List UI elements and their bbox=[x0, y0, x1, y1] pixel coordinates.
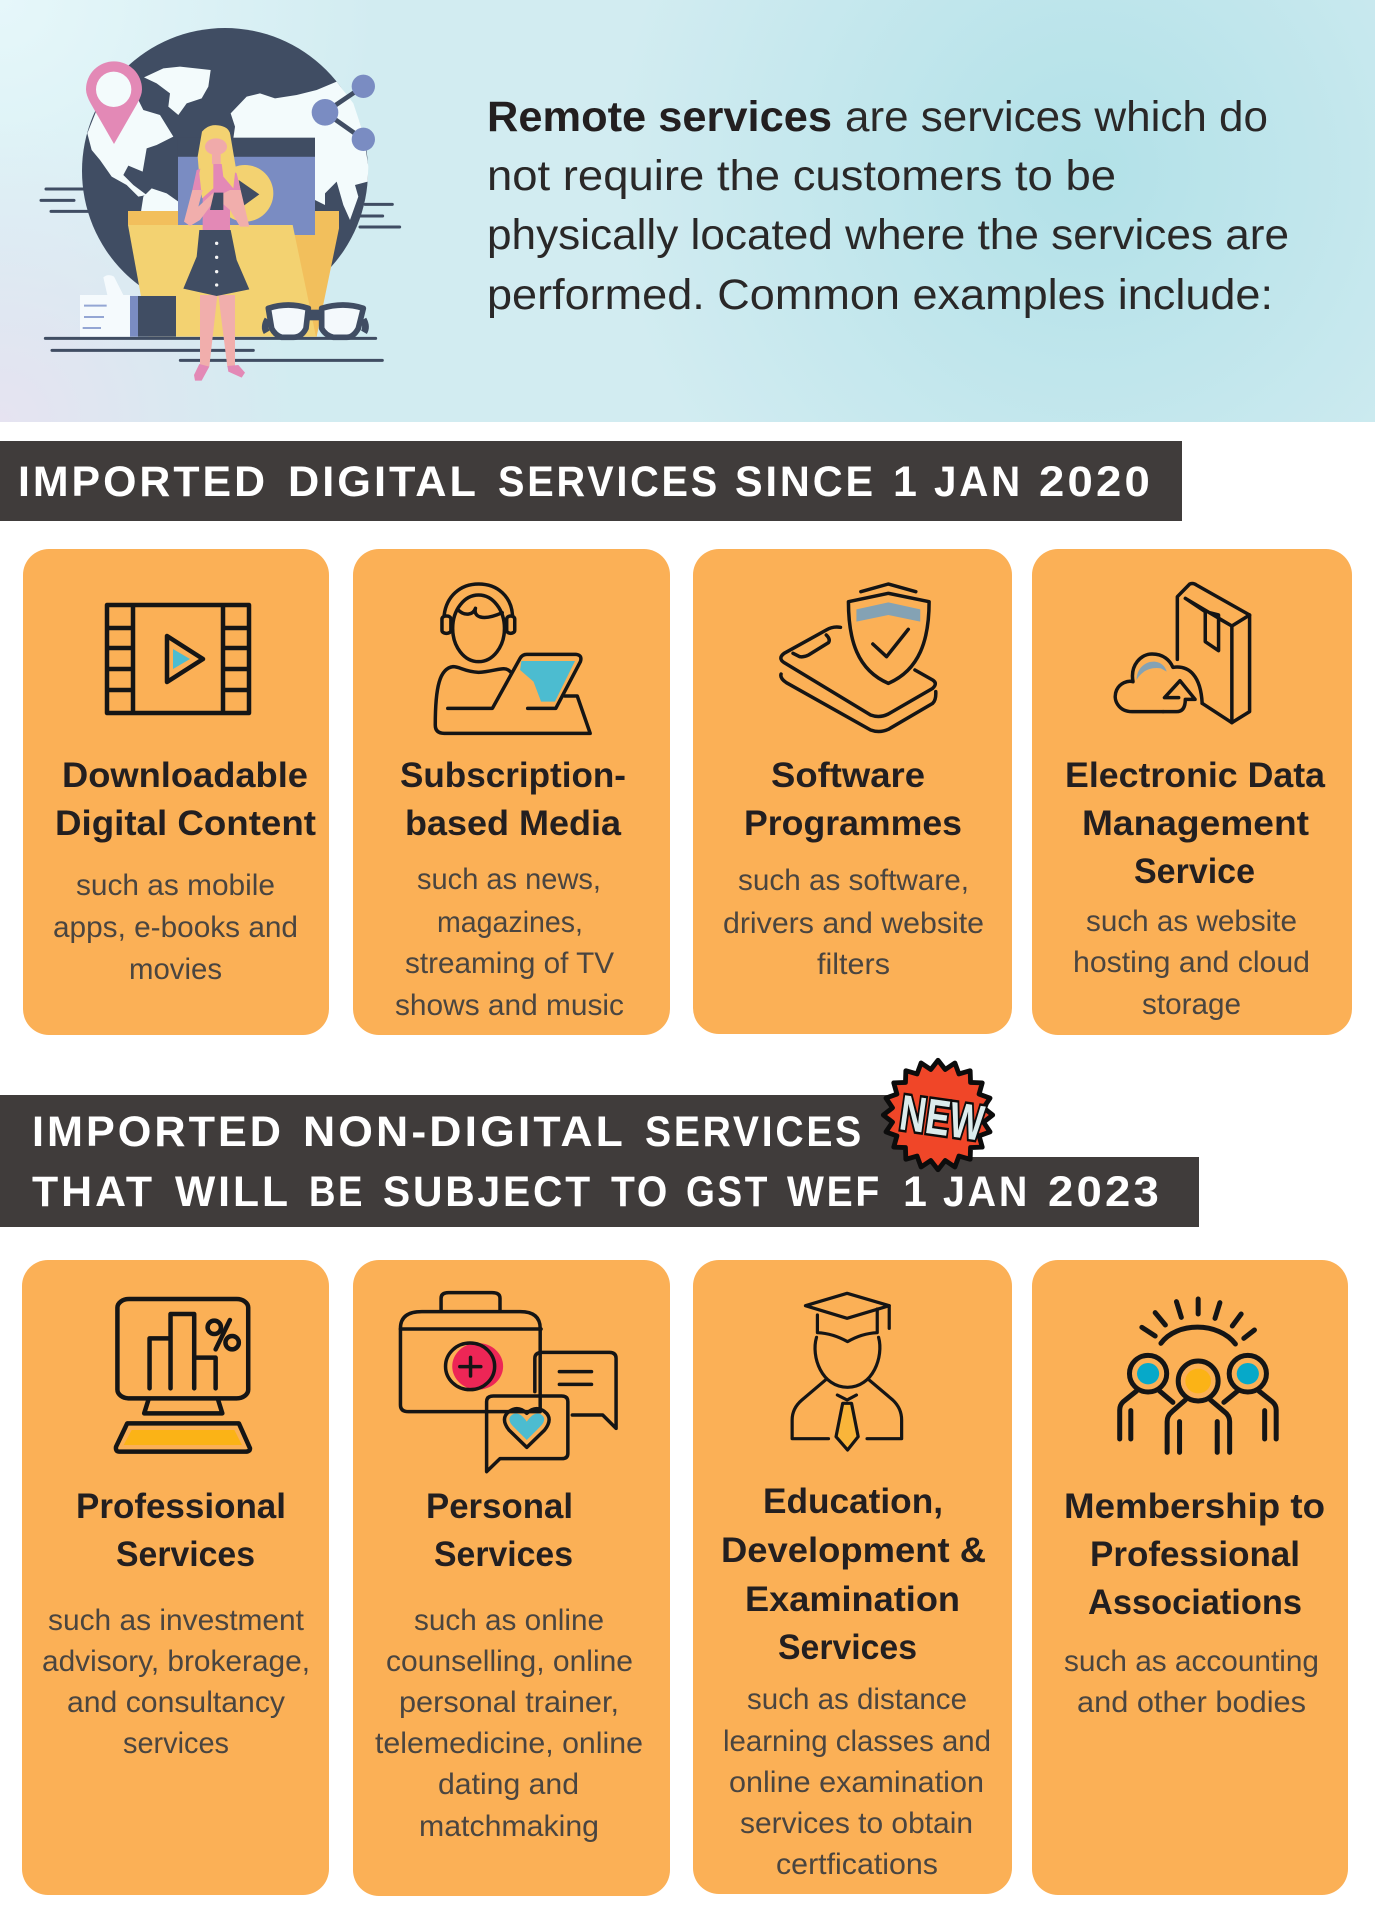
hero paragraph: physically located where the services are bbox=[487, 211, 1289, 259]
heading: Software bbox=[771, 756, 925, 795]
icon: location pin bbox=[86, 61, 142, 144]
section banner: imported digital services bbox=[0, 441, 1182, 521]
heading bbox=[1065, 756, 1326, 891]
speed lines bbox=[41, 189, 400, 360]
hero paragraph: are services which do bbox=[845, 93, 1268, 141]
heading: Professional bbox=[1090, 1535, 1300, 1574]
icon: graduate bbox=[792, 1293, 902, 1450]
folder back bbox=[128, 211, 339, 337]
heading: Services bbox=[116, 1535, 255, 1574]
description: online examination bbox=[729, 1766, 984, 1799]
heading: Personal bbox=[426, 1487, 573, 1526]
folder front bbox=[128, 225, 316, 337]
section banner: imported non-digital services: 2023 bbox=[1048, 1168, 1162, 1216]
description: storage bbox=[1142, 988, 1241, 1021]
heading bbox=[744, 756, 962, 843]
description: such as news, bbox=[417, 863, 601, 896]
section banner: imported non-digital services: BE bbox=[309, 1168, 365, 1216]
heading: Service bbox=[1134, 852, 1255, 891]
card: software programmes bbox=[693, 549, 1012, 1034]
description: dating and bbox=[438, 1768, 579, 1801]
heading: Management bbox=[1082, 804, 1309, 843]
section banner: imported non-digital services: WILL bbox=[175, 1168, 291, 1216]
heading: Associations bbox=[1088, 1583, 1302, 1622]
section banner: imported non-digital services: GST bbox=[686, 1168, 770, 1216]
description: such as website bbox=[1086, 905, 1297, 938]
heading: Services bbox=[778, 1628, 917, 1667]
section banner: imported non-digital services: JAN bbox=[943, 1168, 1030, 1216]
section banner: imported digital services: 2020 bbox=[1039, 458, 1153, 506]
heading: Education, bbox=[763, 1482, 943, 1521]
icon: glasses bbox=[265, 305, 366, 337]
icon: share nodes bbox=[312, 75, 375, 151]
description bbox=[723, 864, 984, 981]
heading: based Media bbox=[405, 804, 622, 843]
description: hosting and cloud bbox=[1073, 946, 1310, 979]
section banner: imported non-digital services: WEF bbox=[787, 1168, 882, 1216]
hero paragraph: performed. Common examples include: bbox=[487, 271, 1273, 319]
description bbox=[1073, 905, 1310, 1021]
icon: phone with shield bbox=[781, 584, 936, 732]
hero paragraph bbox=[487, 93, 1289, 319]
card: education, development and examination services bbox=[693, 1260, 1012, 1894]
description: streaming of TV bbox=[405, 947, 614, 980]
section banner: imported non-digital services: TO bbox=[611, 1168, 670, 1216]
card: membership to professional associations bbox=[1032, 1260, 1348, 1895]
card: professional services bbox=[22, 1260, 329, 1895]
description: certfications bbox=[776, 1848, 938, 1881]
heading: Subscription- bbox=[400, 756, 626, 795]
hero paragraph: Remote services bbox=[487, 93, 832, 141]
section banner: imported digital services: IMPORTED bbox=[18, 458, 268, 506]
description: magazines, bbox=[437, 906, 583, 939]
description: counselling, online bbox=[386, 1645, 633, 1678]
icon: thumbs up bbox=[80, 275, 176, 337]
card: personal services bbox=[353, 1260, 670, 1896]
icon: box and cloud upload bbox=[1115, 584, 1250, 723]
new badge: NEW bbox=[896, 1084, 988, 1152]
description: such as investment bbox=[48, 1604, 305, 1637]
section banner: imported non-digital services bbox=[0, 1095, 1199, 1227]
description: such as accounting bbox=[1064, 1645, 1319, 1678]
description bbox=[53, 869, 298, 986]
section banner: imported digital services: JAN bbox=[934, 458, 1023, 506]
description: learning classes and bbox=[723, 1725, 991, 1758]
description: filters bbox=[817, 948, 890, 981]
section banner: imported non-digital services: NON-DIGITAL bbox=[303, 1108, 626, 1156]
description bbox=[1064, 1645, 1319, 1719]
description: such as mobile bbox=[76, 869, 275, 902]
description: such as online bbox=[414, 1604, 604, 1637]
section banner: imported non-digital services: IMPORTED bbox=[32, 1108, 284, 1156]
description bbox=[395, 863, 624, 1022]
woman figure bbox=[183, 125, 249, 381]
card: downloadable digital content bbox=[23, 549, 329, 1035]
description: drivers and website bbox=[723, 907, 984, 940]
heading bbox=[426, 1487, 573, 1574]
card: subscription-based media bbox=[353, 549, 670, 1035]
icon: monitor with bar chart bbox=[116, 1299, 250, 1452]
description: and other bodies bbox=[1077, 1686, 1306, 1719]
heading bbox=[400, 756, 626, 843]
heading bbox=[721, 1482, 986, 1667]
description bbox=[375, 1604, 643, 1843]
icon: film strip with play bbox=[107, 605, 249, 713]
section banner: imported digital services: SINCE bbox=[735, 458, 876, 506]
description: telemedicine, online bbox=[375, 1727, 643, 1760]
section banner: imported non-digital services: SERVICES bbox=[645, 1108, 864, 1156]
section banner: imported non-digital services: THAT bbox=[32, 1168, 155, 1216]
description: matchmaking bbox=[419, 1810, 599, 1843]
description: services bbox=[123, 1727, 229, 1760]
icon: group of people with rays bbox=[1120, 1299, 1276, 1452]
heading: Programmes bbox=[744, 804, 962, 843]
globe bbox=[82, 28, 368, 314]
section banner: imported digital services: SERVICES bbox=[498, 458, 720, 506]
icon: person with headphones and tablet bbox=[435, 584, 590, 733]
description: shows and music bbox=[395, 989, 624, 1022]
description: advisory, brokerage, bbox=[42, 1645, 310, 1678]
description: movies bbox=[129, 953, 222, 986]
heading: Membership to bbox=[1064, 1487, 1325, 1526]
section banner: imported non-digital services: 1 bbox=[903, 1168, 930, 1216]
heading bbox=[76, 1487, 286, 1574]
heading: Downloadable bbox=[62, 756, 308, 795]
section banner: imported digital services: 1 bbox=[893, 458, 920, 506]
heading bbox=[1064, 1487, 1325, 1622]
description: apps, e-books and bbox=[53, 911, 298, 944]
hero background band bbox=[0, 0, 1375, 422]
video window bbox=[178, 138, 315, 235]
card: electronic data management service bbox=[1032, 549, 1352, 1035]
heading: Professional bbox=[76, 1487, 286, 1526]
heading bbox=[55, 756, 316, 843]
description: such as software, bbox=[738, 864, 969, 897]
section banner: imported non-digital services: SUBJECT bbox=[383, 1168, 593, 1216]
illustration: woman, globe and folder bbox=[41, 28, 400, 381]
hero paragraph: not require the customers to be bbox=[487, 152, 1116, 200]
description bbox=[42, 1604, 310, 1760]
section banner: imported digital services: DIGITAL bbox=[288, 458, 479, 506]
new badge bbox=[883, 1060, 993, 1170]
heading: Digital Content bbox=[55, 804, 316, 843]
heading: Examination bbox=[745, 1580, 960, 1619]
heading: Development & bbox=[721, 1531, 986, 1570]
icon: medical case with speech bubbles bbox=[400, 1293, 616, 1472]
description: and consultancy bbox=[67, 1686, 285, 1719]
description: services to obtain bbox=[740, 1807, 973, 1840]
heading: Services bbox=[434, 1535, 573, 1574]
heading: Electronic Data bbox=[1065, 756, 1326, 795]
description: such as distance bbox=[747, 1683, 967, 1716]
description bbox=[723, 1683, 991, 1881]
description: personal trainer, bbox=[399, 1686, 619, 1719]
